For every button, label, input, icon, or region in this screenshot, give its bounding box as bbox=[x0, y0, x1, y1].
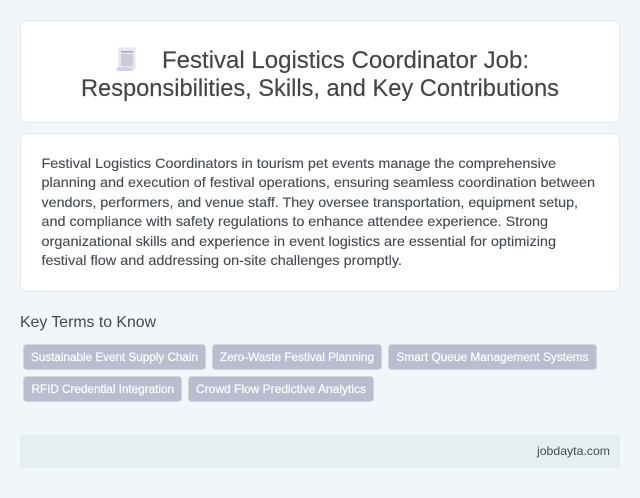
text block: description: organizational skills and experience in event logistics are essential for optimizing bbox=[42, 233, 556, 249]
text block: description: vendors, performers, and venue staff. They oversee transportation, equipment setup, bbox=[42, 194, 578, 210]
tag: smart queue management systems: Smart Queue Management Systems bbox=[396, 350, 588, 364]
icon: document scroll bbox=[116, 48, 136, 71]
tag: zero-waste festival planning bbox=[212, 344, 382, 370]
tag: sustainable event supply chain bbox=[24, 344, 206, 370]
tag: crowd flow predictive analytics: Crowd Flow Predictive Analytics bbox=[196, 382, 366, 396]
footer bar bbox=[20, 434, 620, 468]
text block: description bbox=[42, 155, 595, 268]
heading: title bbox=[81, 47, 559, 102]
panel: title card bbox=[20, 20, 620, 122]
text block: description: Festival Logistics Coordinators in tourism pet events manage the comprehensive bbox=[42, 155, 556, 171]
text block: description: and compliance with safety regulations to enhance attendee experience. Strong bbox=[42, 213, 548, 229]
tag: rfid credential integration bbox=[24, 376, 182, 402]
heading: key terms: Key Terms to Know bbox=[20, 314, 156, 331]
panel: description bbox=[20, 134, 620, 292]
tag: sustainable event supply chain: Sustainable Event Supply Chain bbox=[31, 350, 198, 364]
tag: smart queue management systems bbox=[388, 344, 596, 370]
text block: description: festival flow and addressing on-site challenges promptly. bbox=[42, 252, 402, 268]
heading: title: Festival Logistics Coordinator Job: bbox=[162, 47, 529, 74]
footer text: jobdayta.com bbox=[536, 444, 610, 458]
heading: title: Responsibilities, Skills, and Key Contributions bbox=[81, 75, 559, 102]
tag: crowd flow predictive analytics bbox=[188, 376, 374, 402]
text block: description: planning and execution of festival operations, ensuring seamless coordination between bbox=[42, 174, 595, 190]
tag: rfid credential integration: RFID Credential Integration bbox=[32, 382, 174, 396]
tag: zero-waste festival planning: Zero-Waste Festival Planning bbox=[220, 350, 374, 364]
